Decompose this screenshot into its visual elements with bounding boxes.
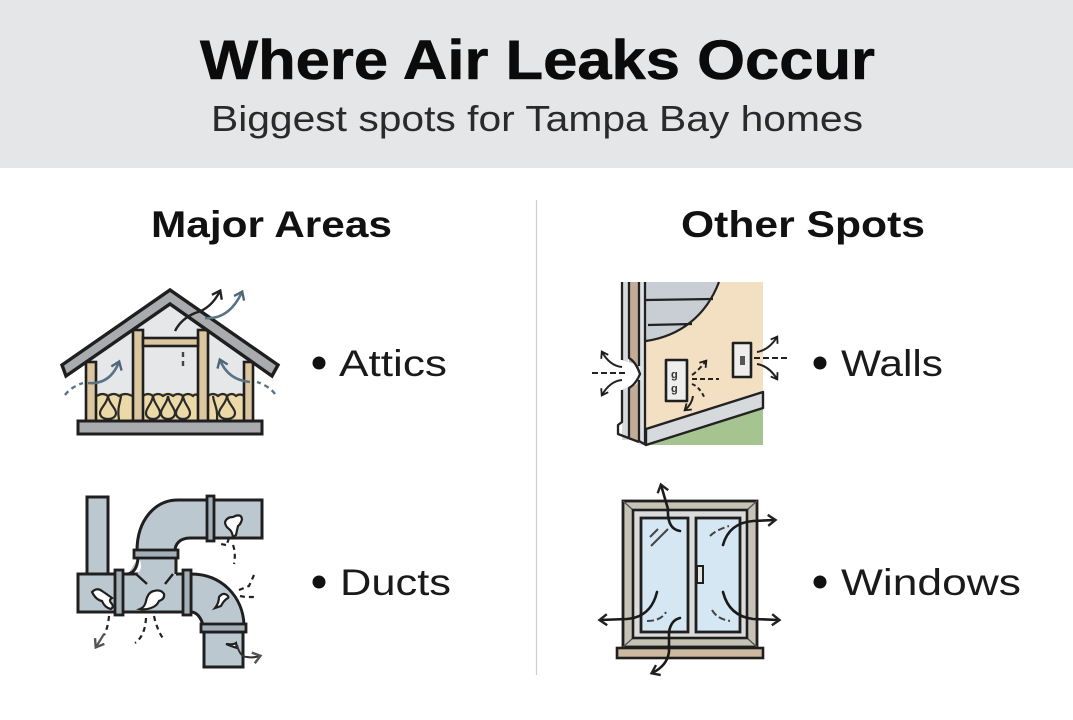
heading: Other Spots: Other Spots [681, 204, 925, 245]
icon: ducts [78, 496, 262, 667]
icon: wall: g [671, 383, 678, 395]
title: Where Air Leaks Occur [200, 28, 875, 91]
label: Ducts [312, 562, 451, 603]
label: Walls: Walls [841, 343, 943, 384]
label: Ducts: Ducts [340, 562, 451, 603]
icon: wall: g [671, 369, 678, 381]
icon: attic [62, 290, 278, 434]
label: Attics [312, 343, 447, 384]
icon: window [600, 485, 779, 673]
heading: Major Areas: Major Areas [151, 204, 392, 245]
label: Walls [814, 343, 943, 384]
header band [0, 0, 1073, 168]
label: Attics: Attics [339, 343, 447, 384]
center divider [536, 200, 538, 675]
label: Windows: Windows [841, 562, 1021, 603]
subtitle: Biggest spots for Tampa Bay homes [211, 98, 863, 139]
icon: wall [592, 282, 787, 445]
